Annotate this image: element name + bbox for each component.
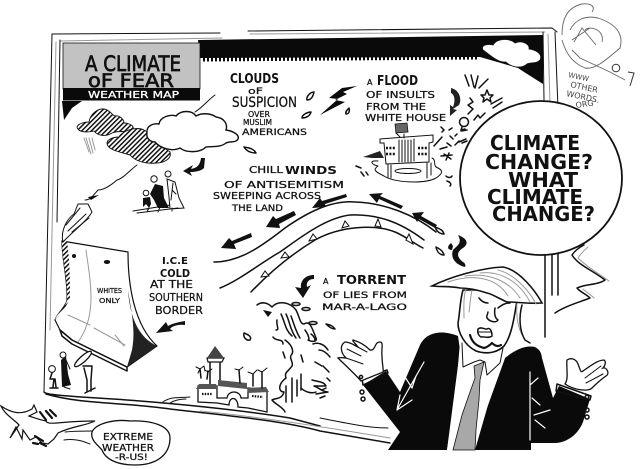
curved arrow to family (183, 158, 205, 176)
signature: WWW (568, 71, 590, 83)
wall: WHITES (97, 287, 122, 295)
wind arrows (221, 193, 437, 249)
collar (462, 343, 503, 375)
text: a flood of insults: WHITE HOUSE (365, 113, 446, 124)
speech balloon: WHAT (508, 168, 578, 192)
people at wall (49, 349, 95, 393)
family walking (133, 171, 184, 213)
left hand (338, 340, 383, 381)
text: clouds of suspicion: oF (248, 87, 263, 97)
text: a flood of insults: OF INSULTS (366, 90, 435, 101)
text: ice cold: BORDER (155, 304, 203, 317)
text: a torrent of lies (322, 272, 407, 313)
arrow to wall (156, 321, 185, 333)
right cuff (556, 384, 591, 400)
white house (356, 123, 452, 186)
black sky band (62, 35, 543, 120)
text: a flood of insults: FLOOD (377, 74, 418, 89)
caricature of president (338, 267, 608, 450)
suit highlights (397, 362, 550, 440)
text: clouds of suspicion: MUSLIM (243, 118, 272, 127)
speech bubble: EXTREME (103, 432, 153, 443)
mar-a-lago (163, 346, 269, 412)
text: a torrent of lies: A (323, 277, 329, 286)
jacket left side and sleeve (363, 333, 460, 450)
text: chill winds: SWEEPING ACROSS (213, 191, 321, 202)
text: chill winds: WINDS (285, 164, 337, 177)
weather fronts (214, 202, 436, 292)
dragon (1, 405, 95, 446)
signature: OTHER (570, 80, 599, 95)
text: clouds of suspicion: AMERICANS (242, 128, 307, 138)
right hand (565, 359, 608, 390)
text: a flood of insults: A (367, 78, 373, 87)
icon: lightning bolt (320, 86, 357, 115)
icon: raindrops (244, 92, 444, 340)
text: a torrent of lies: OF LIES FROM (323, 291, 407, 301)
text: clouds of suspicion: OVER (248, 110, 270, 119)
signature (562, 4, 634, 110)
left cuff (362, 370, 388, 385)
text: chill winds: OF ANTISEMITISM (224, 180, 344, 191)
speech bubble: WEATHER (102, 443, 154, 454)
icon: hurricane (448, 235, 467, 267)
speech balloon: CLIMATE (490, 131, 580, 155)
text: chill winds: THE LAND (231, 204, 283, 214)
text: ice cold: AT THE (150, 278, 193, 291)
text: ice cold: I.C.E (162, 256, 188, 267)
text: chill winds (213, 164, 344, 214)
title panel (63, 43, 200, 101)
wall: ONLY (99, 297, 121, 305)
curved arrow above torrent (295, 275, 314, 298)
text: clouds of suspicion: CLOUDS (230, 72, 279, 87)
speech balloon: CHANGE? (492, 202, 595, 226)
speech balloon: CHANGE? (485, 150, 593, 174)
text: a torrent of lies: MAR-A-LAGO (322, 303, 407, 313)
insults flying from white house (434, 75, 502, 160)
text: clouds of suspicion: SUSPICION (232, 95, 297, 111)
title panel: WEATHER MAP (88, 90, 179, 101)
text: chill winds: CHILL (249, 165, 284, 176)
signature: WORDS. (566, 89, 600, 105)
wall (55, 204, 157, 371)
speech bubble (92, 420, 170, 465)
text: a torrent of lies: TORRENT (337, 272, 406, 287)
speech balloon: CLIMATE (487, 185, 583, 209)
text: ice cold: SOUTHERN (149, 291, 203, 304)
clouds of suspicion (77, 95, 238, 200)
speech bubble: -R-US! (115, 453, 148, 463)
balloon strings (545, 245, 609, 337)
shirt front (447, 342, 505, 450)
face (458, 290, 517, 353)
torrent waterfall (257, 302, 330, 412)
weather map frame (44, 28, 558, 443)
jacket right side and sleeve (472, 347, 590, 450)
hair (432, 267, 542, 303)
curved arrow near flood (450, 88, 460, 116)
text: ice cold (149, 256, 203, 317)
signature: ORG (575, 99, 594, 110)
title panel: A CLIMATE (85, 52, 181, 76)
text: ice cold: COLD (160, 267, 190, 280)
text: a flood of insults: FROM THE (366, 102, 426, 113)
title panel: oF FEAR (88, 70, 174, 92)
text: clouds of suspicion (230, 72, 307, 138)
tie (453, 362, 484, 450)
speech balloon (460, 101, 622, 255)
text: a flood of insults (365, 74, 446, 124)
